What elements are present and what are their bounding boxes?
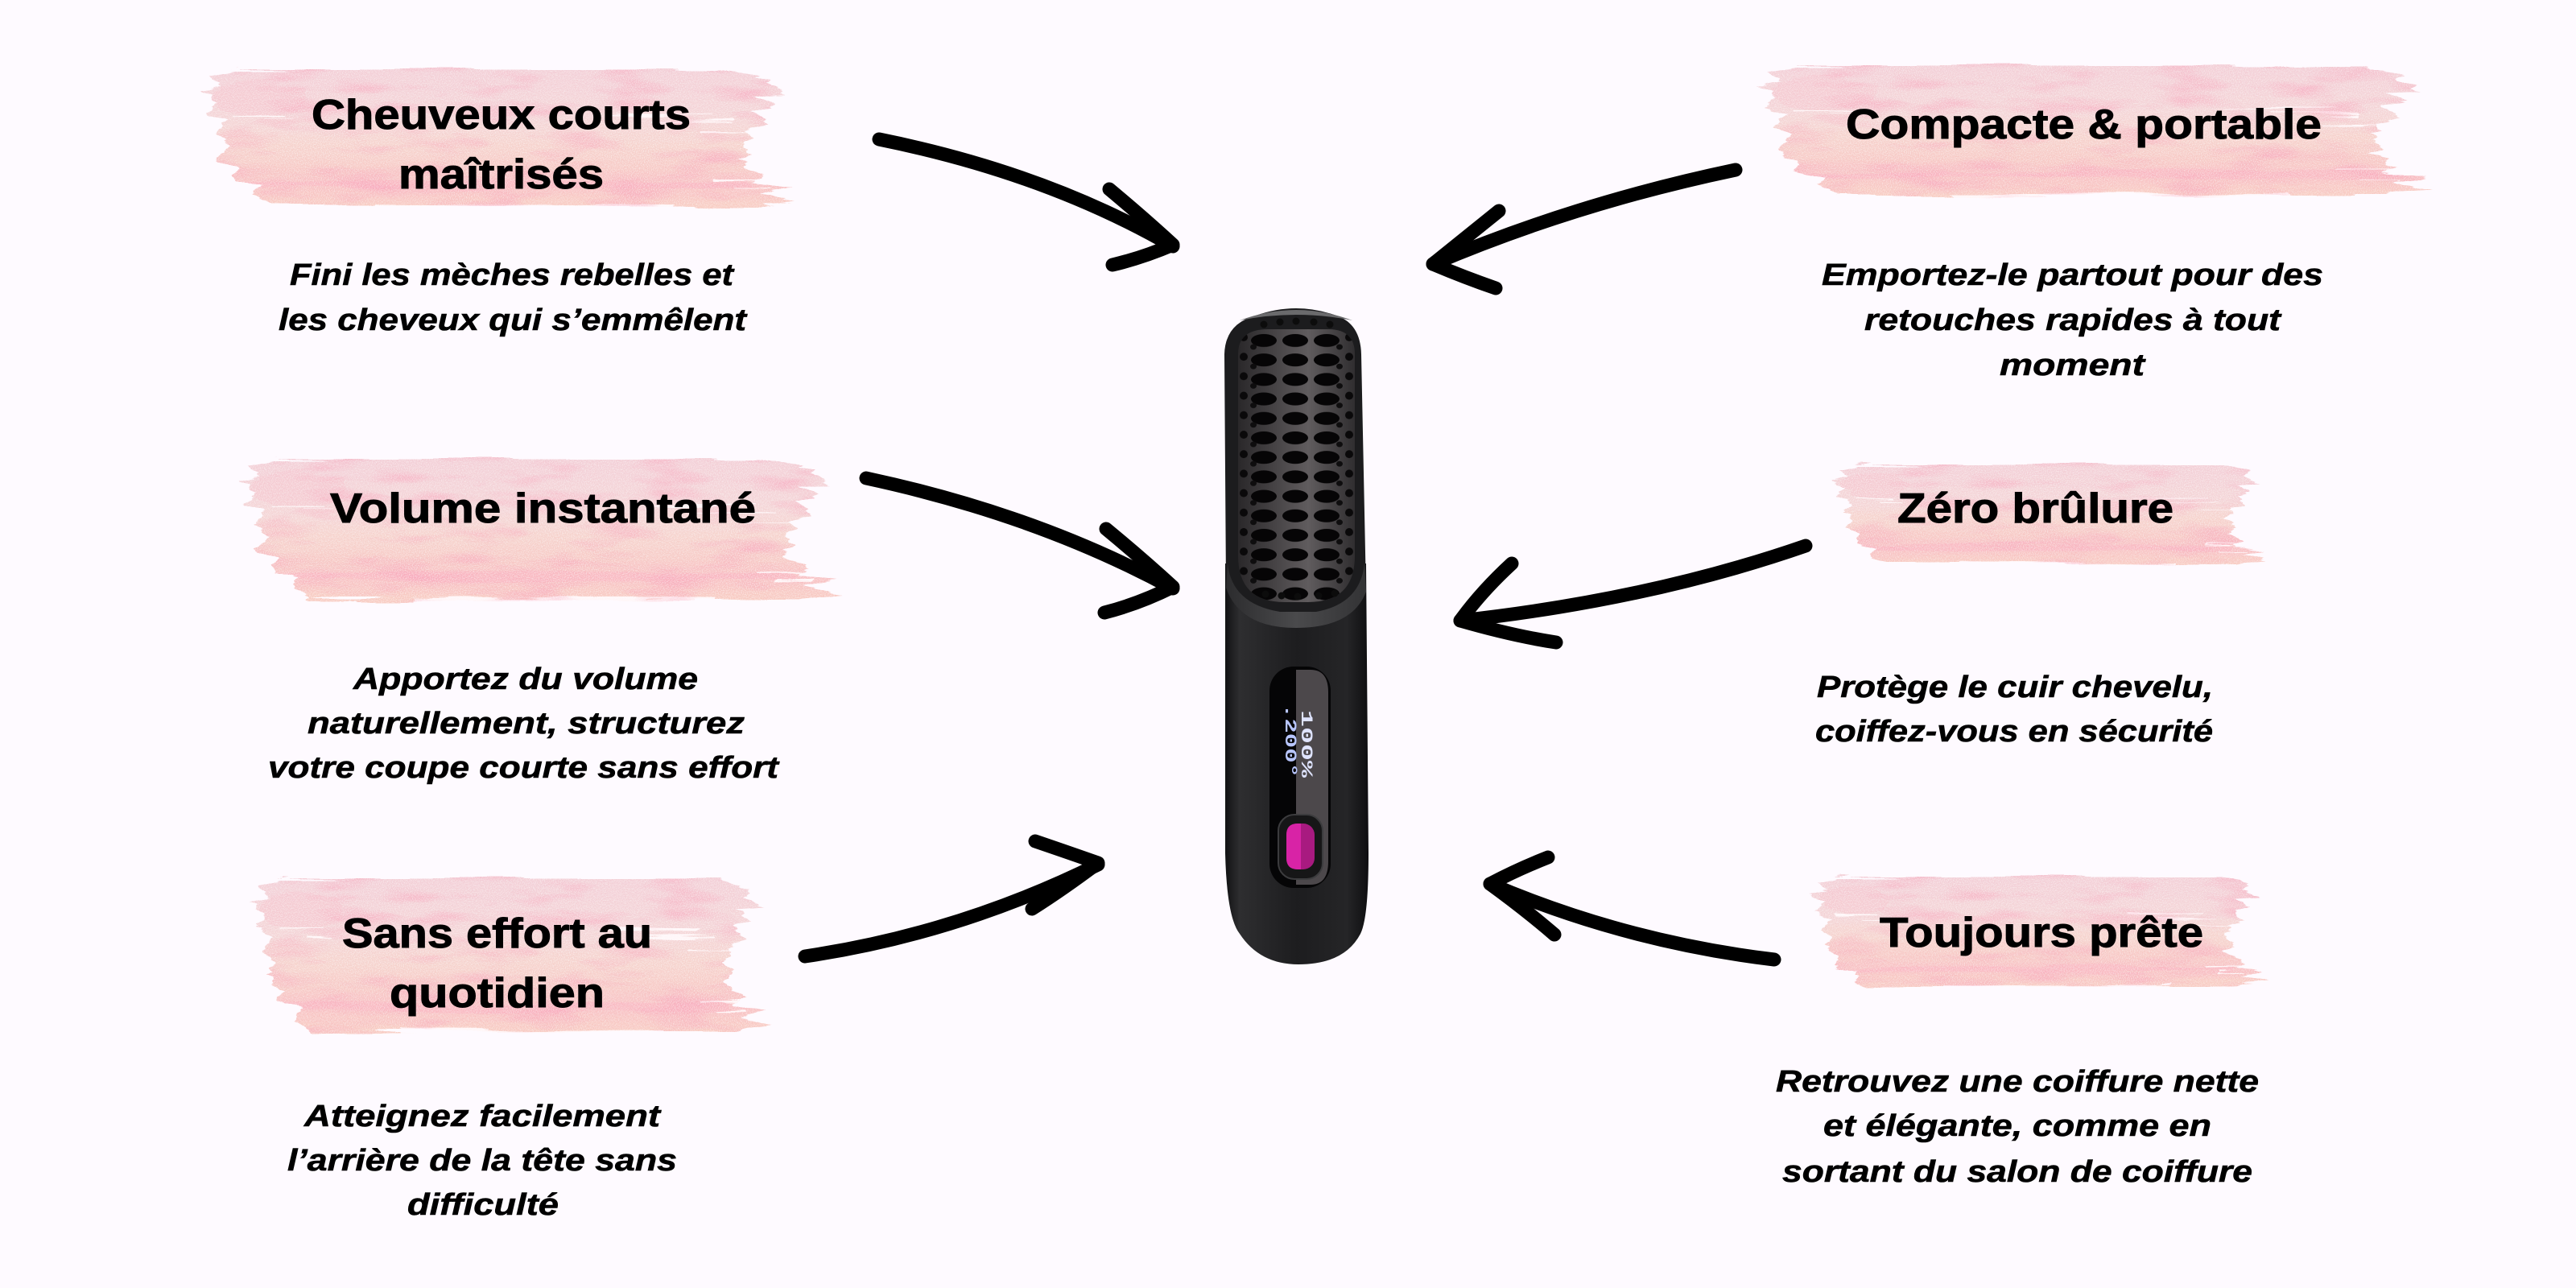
arrow: top left <box>879 139 1173 265</box>
collar highlight <box>1226 564 1366 628</box>
text: toujours prete description: sortant du salon de coiffure <box>1782 1155 2252 1189</box>
display panel <box>1269 667 1331 888</box>
heading: cheveux courts maitrises: Cheuveux courts <box>312 92 691 138</box>
head rim highlight <box>1240 310 1352 320</box>
text: cheveux courts description: Fini les mèches rebelles et <box>290 258 735 292</box>
panel: compacte et portable <box>1757 66 2433 382</box>
text: volume description: naturellement, structurez <box>308 707 745 741</box>
product: cordless hair straightening brush <box>1224 308 1368 964</box>
temperature read-out: .200° <box>1280 704 1298 778</box>
text: compacte description: retouches rapides à tout <box>1864 303 2282 337</box>
brush stroke: compacte <box>1757 66 2433 196</box>
heading: zero brulure: Zéro brûlure <box>1897 485 2174 532</box>
panel: zero brulure <box>1815 465 2268 749</box>
brush stroke: toujours prete <box>1810 877 2268 986</box>
text: zero brulure description: coiffez-vous en sécurité <box>1815 715 2213 749</box>
brush stroke: cheveux courts <box>200 70 797 207</box>
power button <box>1278 815 1323 879</box>
heading: toujours prete: Toujours prête <box>1880 910 2203 956</box>
arrow: bottom left <box>805 841 1098 956</box>
heading: cheveux courts maitrises: maîtrisés <box>398 151 604 198</box>
text: zero brulure description: Protège le cuir chevelu, <box>1817 671 2213 704</box>
arrow: bottom right <box>1490 857 1774 960</box>
heading: sans effort au quotidien: Sans effort au <box>342 910 652 957</box>
text: compacte description: moment <box>2000 349 2146 382</box>
arrow: top right <box>1433 170 1736 288</box>
text: sans effort description: Atteignez facilement <box>303 1100 662 1133</box>
brush head <box>1224 308 1366 628</box>
text: compacte description: Emportez-le partout pour des <box>1822 258 2323 292</box>
bristles <box>1238 331 1355 602</box>
panel: volume instantane <box>238 460 841 785</box>
arrow: middle right <box>1460 546 1806 642</box>
brush stroke: sans effort <box>250 879 772 1032</box>
brush stroke: volume <box>238 460 841 600</box>
text: cheveux courts description: les cheveux qui s’emmêlent <box>279 303 748 337</box>
heading: volume instantane: Volume instantané <box>330 485 756 532</box>
text: sans effort description: l’arrière de la tête sans <box>287 1144 677 1178</box>
text: volume description: Apportez du volume <box>353 663 698 696</box>
heading: compacte et portable: Compacte & portable <box>1846 101 2322 148</box>
bristle tips <box>1261 317 1338 601</box>
battery read-out: 100% <box>1296 710 1315 779</box>
heading: sans effort au quotidien: quotidien <box>390 970 605 1017</box>
brush stroke: zero brulure <box>1832 465 2268 564</box>
brush handle <box>1225 564 1368 964</box>
panel: sans effort au quotidien <box>250 879 772 1222</box>
panel: cheveux courts <box>200 70 797 337</box>
bristle pad <box>1238 329 1355 602</box>
text: toujours prete description: Retrouvez une coiffure nette <box>1776 1065 2259 1099</box>
arrow: middle left <box>866 478 1173 613</box>
text: volume description: votre coupe courte sans effort <box>268 751 780 785</box>
panel: toujours prete <box>1776 877 2268 1189</box>
text: sans effort description: difficulté <box>407 1188 559 1222</box>
text: toujours prete description: et élégante, comme en <box>1823 1109 2211 1143</box>
